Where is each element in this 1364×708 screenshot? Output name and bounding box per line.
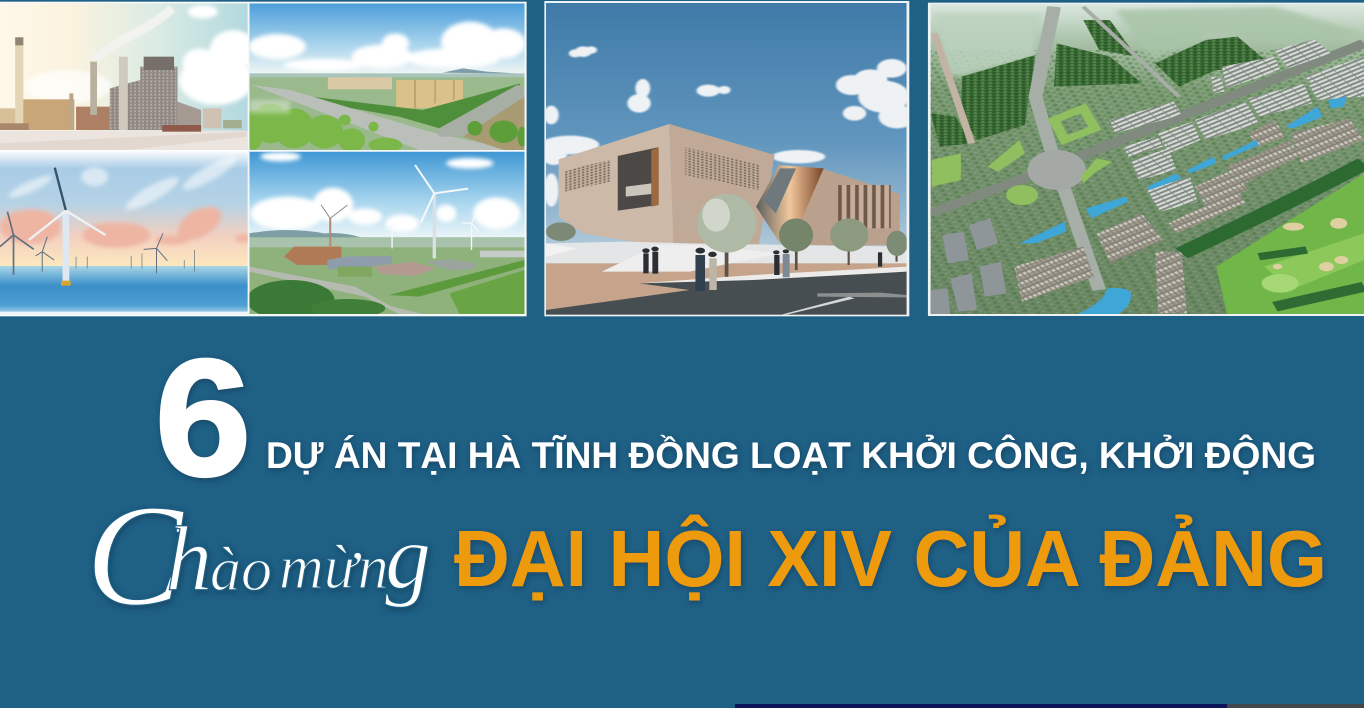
apartment blocks bbox=[931, 218, 1006, 314]
house blocks bbox=[1110, 39, 1364, 212]
script text: Chào mừng: C bbox=[86, 476, 185, 636]
illustration: wind power plant and factories bbox=[247, 152, 525, 320]
photo panel: aerial masterplan bbox=[928, 3, 1364, 316]
central plaza bbox=[1027, 150, 1086, 190]
trees bbox=[546, 194, 908, 277]
golf course bbox=[1182, 163, 1364, 314]
people bbox=[642, 247, 882, 291]
script text: Chào mừng: h bbox=[166, 508, 212, 610]
image collage panel: energy and infrastructure bbox=[0, 2, 527, 320]
plaza and road bbox=[546, 242, 907, 315]
building: main stone volume bbox=[559, 124, 900, 248]
script text: Chào mừng: g bbox=[385, 506, 431, 608]
headline line: party congress: ĐẠI HỘI XIV CỦA ĐẢNG bbox=[454, 514, 1327, 603]
illustration: highway and urban area bbox=[243, 3, 527, 152]
script text: Chào mừng: mừn bbox=[279, 534, 389, 602]
illustration: thermal power plant bbox=[0, 3, 257, 150]
photo panel: cultural building render bbox=[541, 1, 916, 316]
ponds bbox=[1019, 97, 1347, 314]
script text: Chào mừng: ào bbox=[210, 536, 272, 604]
headline line: projects: DỰ ÁN TẠI HÀ TĨNH ĐỒNG LOẠT KHỞI CÔNG, KHỞI ĐỘNG bbox=[266, 434, 1316, 476]
forests bbox=[931, 20, 1275, 147]
illustration: offshore wind farm bbox=[0, 150, 252, 315]
green-roof buildings bbox=[932, 108, 1113, 205]
roads bbox=[931, 7, 1364, 290]
bottom edge bar bbox=[735, 704, 1364, 708]
number six: 6 bbox=[155, 326, 251, 511]
far hazy urban area bbox=[934, 7, 1364, 77]
